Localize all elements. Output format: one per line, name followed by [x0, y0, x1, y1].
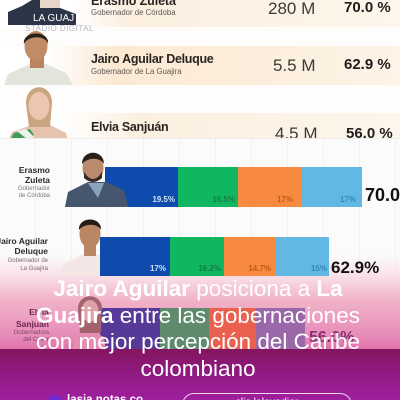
- segment: green: [160, 308, 209, 349]
- row label: Erasmo Zuleta: Zuleta: [25, 174, 50, 184]
- value: 62.9 %: 62.9 %: [344, 56, 391, 73]
- row label: Elvia Sanjuán: Sanjuán: [16, 319, 49, 329]
- panel: bottom purple footer: [0, 349, 400, 400]
- photo: Elvia Sanjuán small: [9, 87, 68, 138]
- row label: Erasmo Zuleta: Erasmo: [19, 165, 50, 175]
- row band: Jairo Aguilar: [0, 46, 400, 85]
- segment: 17% light blue: [301, 167, 362, 207]
- segment: 17% light blue: 17%: [340, 195, 356, 204]
- panel: stacked bar chart: [0, 138, 400, 350]
- panel: top ranking table: [0, 0, 400, 140]
- overlay label: Stadio Digital: STADIO DIGITAL: [25, 24, 94, 33]
- value: 5.5 M: 5.5 M: [273, 56, 316, 75]
- value: 4.5 M: 4.5 M: [275, 124, 318, 143]
- gradient overlay: pink fade: [0, 255, 400, 349]
- value: 56.0 %: 56.0 %: [346, 125, 393, 142]
- row band: Erasmo Zuleta: [0, 0, 400, 27]
- segment: 16.2%: [170, 237, 224, 276]
- photo: Elvia Sanjuán: [72, 296, 106, 349]
- segment: 19.5%: [105, 167, 178, 207]
- headline: colombiano: [140, 356, 256, 381]
- headline: Jairo Aguilar posiciona a La: [53, 276, 343, 301]
- headline: con mejor percepción del Caribe: [36, 329, 360, 354]
- value: 56.0%: 56.0%: [309, 329, 354, 346]
- headline: [36, 276, 360, 381]
- segment: 16.5%: [178, 167, 238, 207]
- row role: Gobernadora del Cesar: del Cesar: [23, 337, 49, 343]
- segment: 17% orange: [238, 167, 301, 207]
- segment: orange: [209, 308, 256, 349]
- row label: Erasmo Zuleta: [19, 165, 50, 184]
- row role: Gobernador de Córdoba: Gobernador de Córdoba: [91, 8, 176, 17]
- row role: Gobernador de La Guajira: [8, 258, 48, 272]
- bar: Erasmo Zuleta: [105, 167, 362, 207]
- row role: Gobernador de La Guajira: La Guajira: [20, 266, 48, 272]
- icon: avatar: [48, 395, 62, 400]
- value: 70.0: 70.0: [365, 185, 400, 205]
- row label: Jairo Aguilar Deluque: [0, 236, 48, 256]
- photo: Erasmo Zuleta small: [8, 0, 76, 25]
- segment: 15%: 15%: [311, 264, 327, 273]
- row role: Gobernadora del Cesar: Gobernadora: [14, 330, 49, 336]
- row role: Gobernador de Córdoba: de Córdoba: [19, 193, 50, 199]
- bar: Jairo Aguilar: [100, 237, 329, 276]
- headline: Guajira entre las gobernaciones: [36, 303, 360, 328]
- row role: Gobernador de La Guajira: Gobernador de: [8, 258, 48, 264]
- segment: 17%: 17%: [150, 264, 166, 273]
- row role: Gobernador de Córdoba: Gobernador: [18, 186, 50, 192]
- segment: 16.5%: 16.5%: [212, 195, 235, 204]
- row role: Gobernadora del Cesar: [14, 330, 49, 343]
- segment: blue: [100, 308, 160, 349]
- row label: Elvia Sanjuán: [16, 307, 49, 329]
- segment: 17%: [100, 237, 170, 276]
- row band: Elvia Sanjuán: [0, 113, 400, 140]
- segment: light blue: [256, 308, 305, 349]
- bar: Elvia Sanjuán: [100, 308, 305, 349]
- segment: 19.5%: 19.5%: [152, 195, 175, 204]
- row role: Gobernador de Córdoba: [18, 186, 50, 199]
- row label: Jairo Aguilar Deluque: Deluque: [14, 246, 48, 256]
- row role: Gobernador de La Guajira: Gobernador de La Guajira: [91, 67, 182, 76]
- segment: 14.7%: 14.7%: [248, 264, 271, 273]
- overlay label: La Guajira: LA GUAJ: [33, 13, 74, 24]
- photo: Erasmo Zuleta: [65, 152, 128, 207]
- row text: Jairo Aguilar Deluque: Jairo Aguilar Deluque: [91, 52, 213, 66]
- footer button: [182, 393, 352, 400]
- segment: 15%: [276, 237, 329, 276]
- segment: 16.2%: 16.2%: [198, 264, 221, 273]
- value: 62.9%: 62.9%: [331, 258, 379, 277]
- segment: 17% orange: 17%: [277, 195, 293, 204]
- segment: 14.7%: [224, 237, 276, 276]
- row text: Elvia Sanjuán: Elvia Sanjuán: [91, 120, 168, 134]
- row label: Elvia Sanjuán: Elvia: [29, 307, 49, 317]
- photo: Jairo Aguilar small: [4, 31, 73, 85]
- chart row: Elvia Sanjuán: [14, 296, 354, 349]
- photo: Jairo Aguilar: [62, 220, 101, 272]
- footer handle with avatar: [48, 394, 143, 400]
